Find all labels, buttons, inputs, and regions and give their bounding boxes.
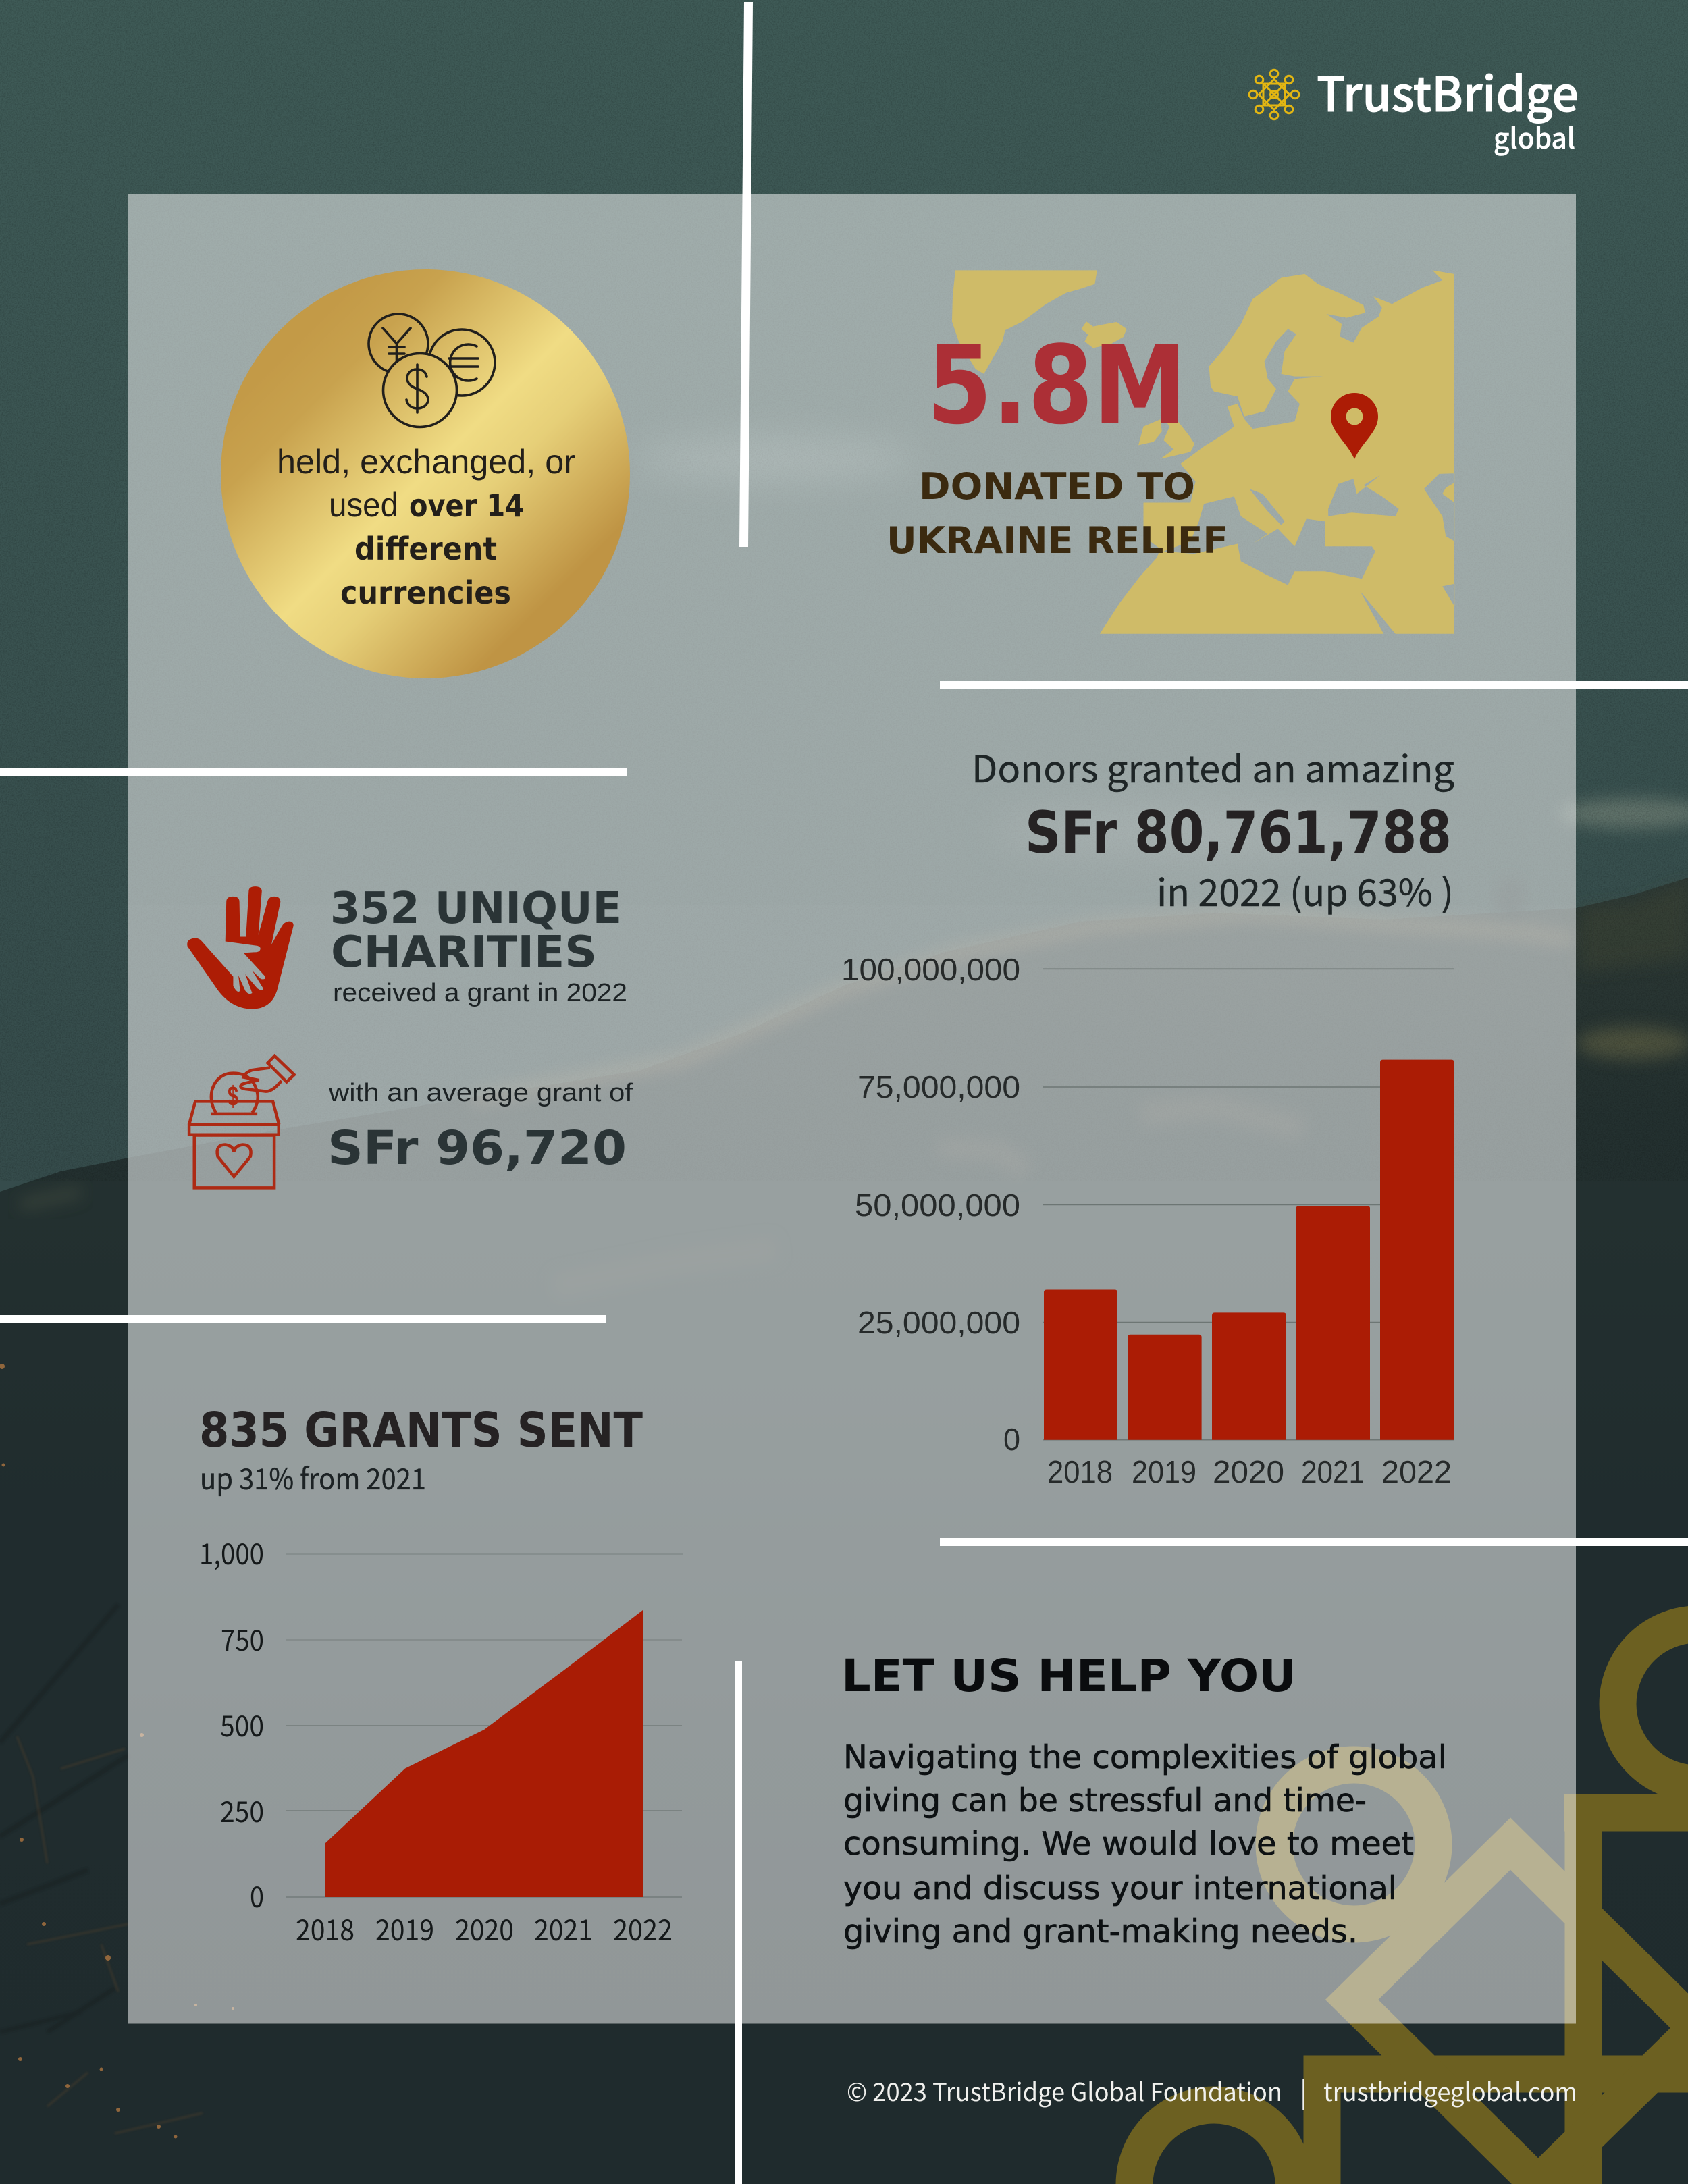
y axis labels (841, 952, 1020, 1457)
y axis labels: 50,000,000 (855, 1188, 1020, 1223)
help paragraph: giving can be stressful and time- (843, 1782, 1367, 1819)
footer: trustbridgeglobal.com (1323, 2072, 1577, 2108)
footer (847, 2070, 1577, 2111)
icon: donation box (189, 1056, 294, 1188)
grants heading: 835 GRANTS SENT (199, 1402, 643, 1458)
y axis labels: 0 (250, 1874, 264, 1916)
icon: logo emblem (1249, 70, 1299, 119)
panel: let us help you (841, 1650, 1447, 1950)
grants subheading: up 31% from 2021 (200, 1456, 426, 1498)
charities heading: 352 UNIQUE (330, 884, 622, 934)
donated amount: 5.8M (927, 322, 1186, 448)
bars (1044, 1060, 1454, 1440)
y axis labels: 250 (220, 1789, 264, 1831)
y axis labels (199, 1531, 264, 1916)
currencies text (277, 443, 575, 611)
y axis labels: 500 (220, 1703, 264, 1745)
average grant value: SFr 96,720 (327, 1121, 627, 1175)
panel: donors bar chart section (841, 739, 1454, 1489)
icon: helping hands (187, 886, 294, 1009)
x axis labels (296, 1907, 672, 1949)
x axis labels: 2022 (613, 1907, 672, 1949)
currencies text: used (329, 486, 398, 524)
bar chart (841, 952, 1454, 1489)
x axis labels: 2019 (375, 1907, 434, 1949)
gold logo watermark: bottom right (1134, 1624, 1688, 2184)
help paragraph (843, 1739, 1447, 1950)
panel: charities stats (187, 884, 633, 1188)
donated caption: DONATED TO (919, 465, 1195, 508)
map of Europe (952, 270, 1454, 634)
y axis labels: 750 (221, 1618, 264, 1659)
y axis labels: 100,000,000 (841, 952, 1020, 987)
currencies text: over 14 (409, 487, 524, 524)
footer: © 2023 TrustBridge Global Foundation (847, 2072, 1282, 2108)
charities heading: CHARITIES (331, 928, 597, 978)
y axis labels: 75,000,000 (858, 1069, 1020, 1104)
donors total: SFr 80,761,788 (1025, 799, 1452, 867)
x axis labels: 2018 (296, 1907, 354, 1949)
logo subtitle: global (1494, 116, 1575, 157)
currencies text: currencies (340, 575, 511, 611)
translucent main panel (128, 194, 1576, 2024)
help heading: LET US HELP YOU (841, 1650, 1296, 1702)
y axis labels: 25,000,000 (858, 1305, 1020, 1340)
icon: currency coins (369, 314, 495, 427)
help paragraph: you and discuss your international (843, 1870, 1397, 1907)
logo: TrustBridge global (1249, 57, 1579, 157)
x axis labels: 2020 (455, 1907, 514, 1949)
y axis labels: 1,000 (199, 1531, 264, 1573)
x axis labels: 2018 (1047, 1454, 1113, 1489)
donated caption (887, 465, 1228, 562)
logo wordmark: TrustBridge (1317, 57, 1579, 126)
icon: donation box: $ (228, 1080, 238, 1112)
panel: grants area chart section (199, 1402, 683, 1949)
help paragraph: Navigating the complexities of global (843, 1739, 1447, 1776)
panel: Ukraine relief map (887, 270, 1454, 634)
donors intro text: Donors granted an amazing (972, 739, 1454, 793)
area series (325, 1610, 643, 1897)
x axis labels: 2022 (1381, 1454, 1452, 1489)
help paragraph: consuming. We would love to meet (843, 1826, 1414, 1863)
currencies text: held, exchanged, or (277, 443, 575, 481)
currencies text: different (354, 531, 497, 567)
help paragraph: giving and grant-making needs. (843, 1913, 1358, 1950)
average grant caption: with an average grant of (328, 1079, 633, 1107)
panel: currencies gold circle (221, 269, 630, 678)
x axis labels: 2021 (1301, 1454, 1365, 1489)
charities heading (330, 884, 622, 978)
x axis labels (1047, 1454, 1452, 1489)
icon: location pin (1331, 393, 1378, 459)
footer: | (1300, 2070, 1307, 2111)
x axis labels: 2020 (1213, 1454, 1284, 1489)
donors growth: in 2022 (up 63% ) (1157, 863, 1454, 917)
x axis labels: 2019 (1132, 1454, 1196, 1489)
donated caption: UKRAINE RELIEF (887, 519, 1228, 562)
y axis labels: 0 (1003, 1422, 1020, 1457)
x axis labels: 2021 (534, 1907, 593, 1949)
charities caption: received a grant in 2022 (333, 979, 627, 1007)
area chart (199, 1531, 683, 1949)
